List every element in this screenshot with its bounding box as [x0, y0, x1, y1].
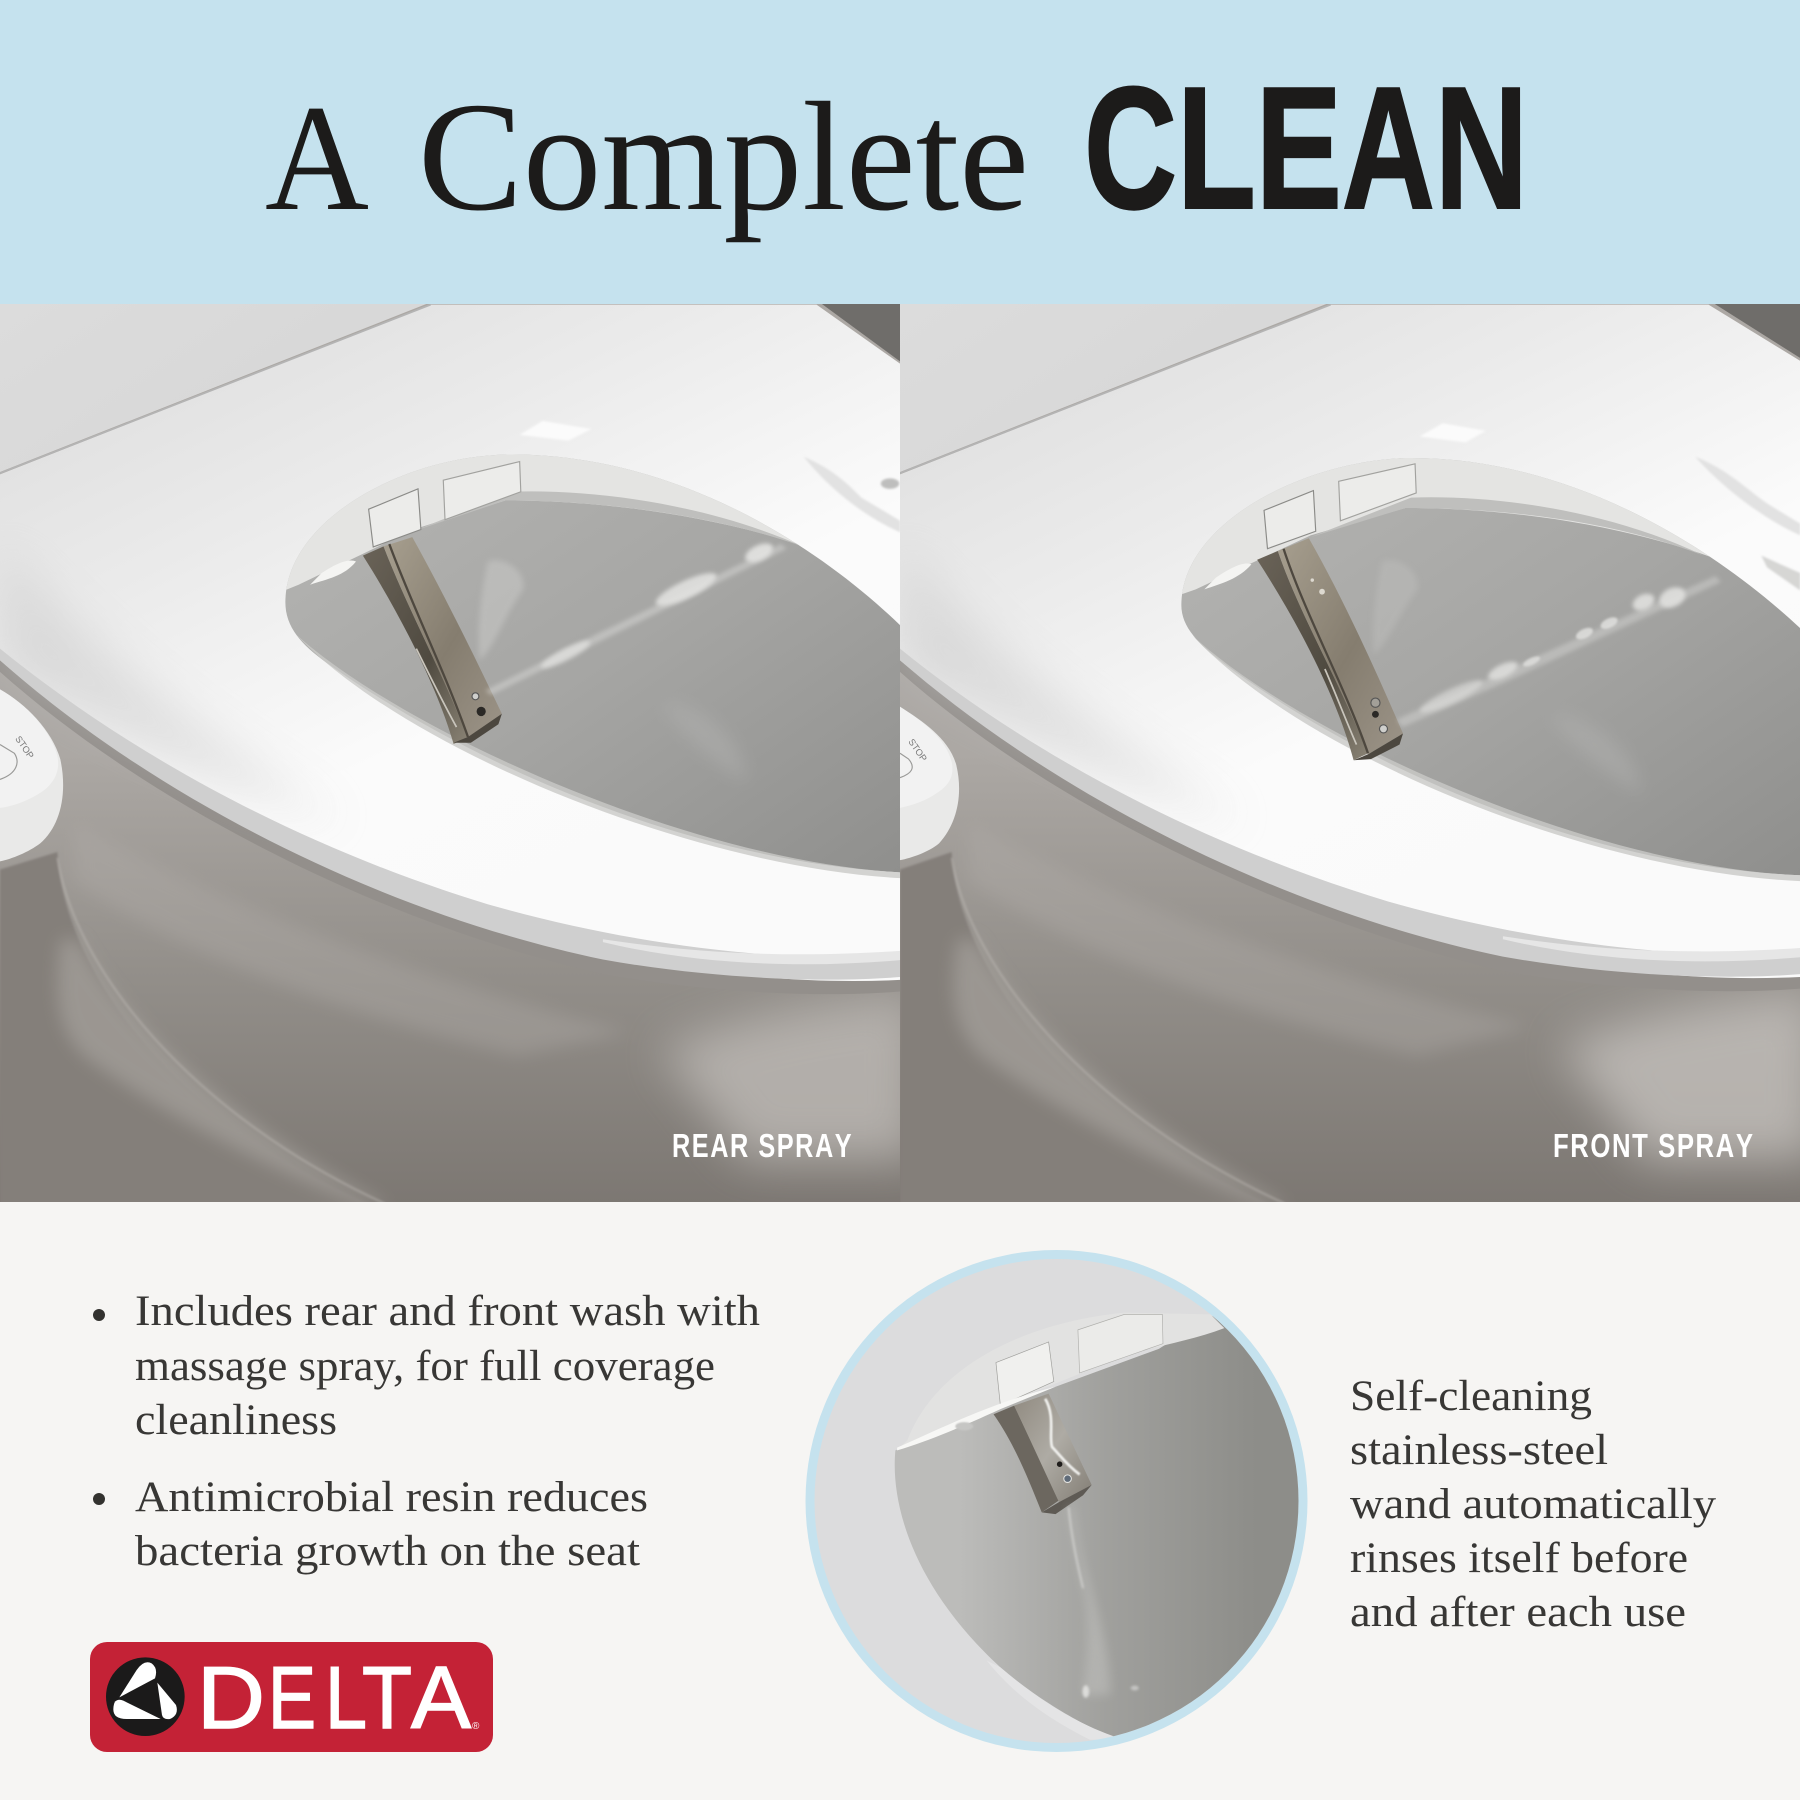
- background corner: [1715, 304, 1800, 358]
- bullet list: Antimicrobial resin reduces: [135, 1474, 648, 1521]
- text block: self-cleaning wand: [1350, 1373, 1717, 1636]
- inner rim and tabs: [1182, 458, 1710, 594]
- bullet list: [93, 1288, 760, 1575]
- bullet list: bacteria growth on the seat: [135, 1528, 640, 1575]
- water spray: [485, 540, 787, 695]
- bidet control panel: STOP: [906, 737, 929, 763]
- header band: [0, 0, 1800, 304]
- water stream: [1068, 1506, 1139, 1698]
- title: CLEAN: [1084, 50, 1528, 245]
- icon: Delta triangle mark: [106, 1657, 185, 1736]
- label: front spray: FRONT SPRAY: [1553, 1128, 1755, 1165]
- wordmark: T: [362, 1648, 412, 1747]
- spray wand: [1257, 538, 1403, 760]
- inner rim and tabs: [286, 454, 798, 590]
- logo: Delta: [90, 1642, 493, 1752]
- seat opening and bowl interior: [1167, 431, 1800, 881]
- water spray: [1397, 576, 1721, 727]
- logo: Delta: ®: [472, 1721, 480, 1732]
- seat reflection: [1422, 424, 1482, 442]
- spray wand: [363, 537, 502, 744]
- bidet control panel: STOP: [13, 734, 36, 760]
- panel: rear spray photo: [0, 300, 919, 1212]
- wordmark: L: [325, 1648, 367, 1747]
- seat underside rim: [0, 649, 900, 994]
- toilet lid: [0, 300, 436, 472]
- toilet bowl exterior: [900, 300, 1800, 1212]
- seat: [900, 305, 1800, 978]
- bidet control panel: [0, 689, 63, 861]
- inner rim and tabs: [897, 1313, 1224, 1450]
- text block: self-cleaning wand: Self-cleaning: [1350, 1373, 1592, 1420]
- wordmark: [197, 1648, 471, 1747]
- toilet bowl exterior: [0, 300, 919, 1212]
- text block: self-cleaning wand: stainless-steel: [1350, 1427, 1608, 1474]
- text block: self-cleaning wand: and after each use: [1350, 1589, 1686, 1636]
- bullet list: cleanliness: [135, 1397, 337, 1444]
- wordmark: D: [197, 1648, 265, 1747]
- wordmark: A: [411, 1648, 471, 1747]
- self-cleaning wand: [994, 1394, 1092, 1514]
- toilet lid: [900, 300, 1336, 472]
- text block: self-cleaning wand: rinses itself before: [1350, 1535, 1688, 1582]
- label: rear spray: REAR SPRAY: [672, 1128, 853, 1165]
- title: A: [265, 74, 369, 242]
- seat: [0, 305, 900, 981]
- text block: self-cleaning wand: wand automatically: [1350, 1481, 1717, 1528]
- seat reflection: [522, 422, 588, 440]
- panel: front spray photo: [900, 300, 1800, 1212]
- wordmark: E: [268, 1648, 316, 1747]
- background corner: [822, 304, 900, 362]
- bullet list: massage spray, for full coverage: [135, 1343, 715, 1390]
- bullet list: Includes rear and front wash with: [135, 1288, 760, 1335]
- title: [265, 50, 1528, 245]
- title: Complete: [418, 70, 1029, 243]
- bidet control panel: [900, 707, 959, 860]
- seat opening and bowl interior: [270, 426, 900, 878]
- circular inset: self-cleaning wand photo: [806, 1250, 1308, 1752]
- seat underside rim: [900, 649, 1800, 991]
